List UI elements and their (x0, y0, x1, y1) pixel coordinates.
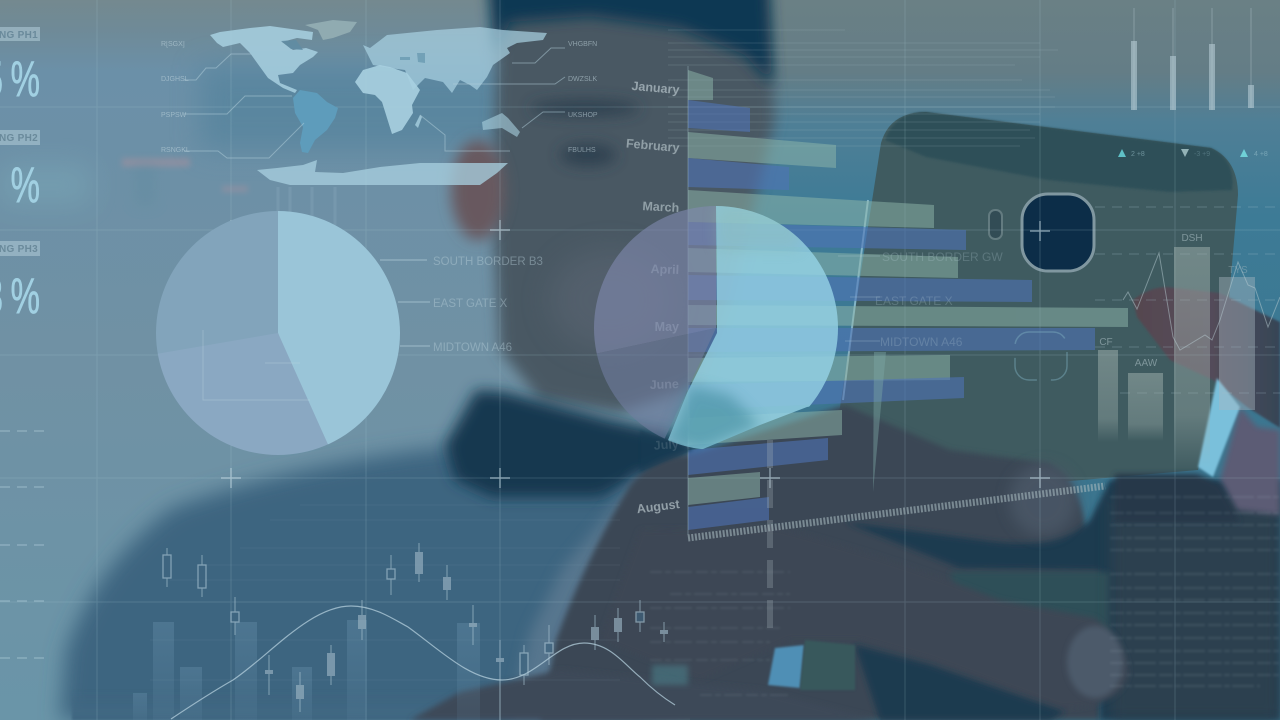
pie chart: left (150, 205, 405, 460)
lower right finger (1220, 407, 1280, 515)
inner dark spot (668, 385, 760, 450)
phone left edge highlight (843, 200, 868, 400)
panel: left percentage stats (0, 27, 40, 324)
candlestick chart (163, 543, 668, 720)
bar labels: DSH (1181, 233, 1203, 244)
eurasia (363, 27, 547, 93)
stat tag 1: NG PH1 (0, 30, 38, 41)
north america (210, 26, 318, 93)
month labels: June (649, 377, 679, 392)
pie labels (433, 256, 543, 354)
second pie connectors and labels: MIDTOWN A46 (880, 335, 963, 349)
slice main (278, 211, 400, 444)
gap under fingers (845, 480, 1280, 720)
chart tick axis (688, 486, 1105, 538)
dark finger behind (1115, 474, 1240, 522)
phone glimpse green (800, 640, 855, 690)
bright vertical stripe (873, 352, 886, 492)
world map (210, 20, 547, 185)
map callout labels: R[SGX] (161, 41, 185, 48)
collar (445, 390, 700, 497)
phone edge below finger (950, 572, 1110, 680)
hudson bay (281, 40, 303, 50)
map callout labels: RSNGKL (161, 147, 190, 154)
month labels: July (653, 437, 679, 453)
antarctica (257, 160, 508, 185)
month labels: March (642, 199, 680, 215)
stat tag 3 (0, 241, 40, 256)
bars: green series (688, 70, 1128, 505)
second pie connectors and labels (838, 250, 1003, 349)
ticker indicators: -3 +9 (1194, 151, 1210, 158)
ticker indicators: 2 +8 (1131, 151, 1145, 158)
dark wedge bottom (855, 645, 1065, 720)
phone reflection outline (1015, 332, 1067, 380)
map callout labels: DJGHSL (161, 76, 189, 83)
month labels: February (625, 136, 680, 155)
camera (989, 194, 1094, 271)
neck and face (492, 0, 775, 412)
bar labels (1099, 233, 1248, 369)
map callout labels: DWZSLK (568, 76, 598, 83)
top right candlesticks (1131, 8, 1254, 110)
pie labels: SOUTH BORDER B3 (433, 256, 543, 268)
bar labels: TYS (1228, 265, 1248, 276)
right line chart (1123, 253, 1280, 350)
second pie connectors and labels: EAST GATE X (875, 294, 953, 308)
hair (488, 0, 772, 85)
dark wedge under right pie (640, 430, 693, 472)
south america (293, 90, 338, 153)
map callout labels: PSPSW (161, 112, 187, 119)
palm and fingers (540, 405, 1110, 720)
slice lower left (596, 328, 716, 438)
lower right text panel tint (1110, 495, 1280, 720)
slice upper left (150, 205, 278, 355)
chart left axis (687, 66, 689, 535)
pie chart: right (590, 205, 845, 460)
stat tag 3: NG PH3 (0, 244, 38, 255)
stat value 1: % (11, 51, 40, 107)
faint text block: top right (668, 30, 1058, 146)
lower palm (410, 670, 880, 720)
dashed vertical indicator (767, 440, 773, 630)
stat value 3: % (11, 268, 40, 324)
wave line (171, 606, 675, 719)
shirt bottom edge (72, 690, 572, 720)
month labels: April (650, 262, 679, 277)
map callout labels (161, 41, 598, 154)
second pie connectors and labels: SOUTH BORDER GW (882, 250, 1003, 264)
bars: blue series (688, 100, 1095, 530)
bright gap (1198, 378, 1240, 477)
lighter hand edge (510, 473, 670, 720)
stat tag 2 (0, 130, 40, 145)
thumb (600, 528, 1128, 708)
faint lines on shirt (150, 505, 620, 680)
eye shadows (530, 100, 640, 166)
month labels: January (631, 79, 680, 97)
month labels: August (636, 497, 681, 516)
stat value 2: % (11, 157, 40, 213)
slice upper left (590, 205, 716, 355)
horizontal bar chart (625, 66, 1128, 538)
fingertip (1009, 464, 1077, 536)
top tint of slice (716, 205, 800, 250)
greenland (305, 20, 357, 40)
dashed guides left (0, 431, 44, 658)
bar labels: AAW (1135, 358, 1158, 369)
ticker indicators: 4 +8 (1254, 151, 1268, 158)
shirt (60, 440, 680, 720)
phone glimpse blue (768, 645, 804, 688)
person: shirt, face and hair (60, 0, 775, 720)
month labels: May (655, 320, 679, 334)
thin bars below map (278, 187, 335, 225)
hand (410, 287, 1280, 720)
pie connectors (380, 260, 430, 346)
map callout labels: VHGBFN (568, 41, 597, 48)
thumb nail (1067, 626, 1123, 698)
australia (482, 113, 520, 137)
africa (355, 65, 420, 134)
smile (550, 250, 670, 350)
slice lower left (158, 334, 328, 455)
upper right finger (1133, 287, 1280, 428)
pie labels: EAST GATE X (433, 298, 508, 310)
ticker indicators (1118, 149, 1268, 158)
ear (451, 140, 505, 240)
inner chart axes (203, 330, 310, 400)
teal speck (652, 665, 688, 685)
stat tag 2: NG PH2 (0, 133, 38, 144)
crosshair markers (221, 220, 1050, 488)
faint text block: lower right (1110, 497, 1280, 686)
month labels (625, 79, 681, 516)
dashed guides right (1095, 207, 1280, 393)
phone top band (885, 112, 1233, 192)
faint text block: lower centre (650, 572, 790, 695)
bar labels: CF (1099, 337, 1113, 348)
madagascar (415, 115, 422, 128)
map callout labels: UKSHOP (568, 112, 598, 119)
map callout labels: FBULHS (568, 147, 596, 154)
lower bar chart (133, 620, 480, 720)
slice main (668, 206, 838, 449)
inland seas (400, 53, 425, 63)
pie labels: MIDTOWN A46 (433, 342, 512, 354)
phone (838, 112, 1238, 500)
map callout connectors (184, 48, 565, 158)
right bar chart (1098, 233, 1255, 472)
